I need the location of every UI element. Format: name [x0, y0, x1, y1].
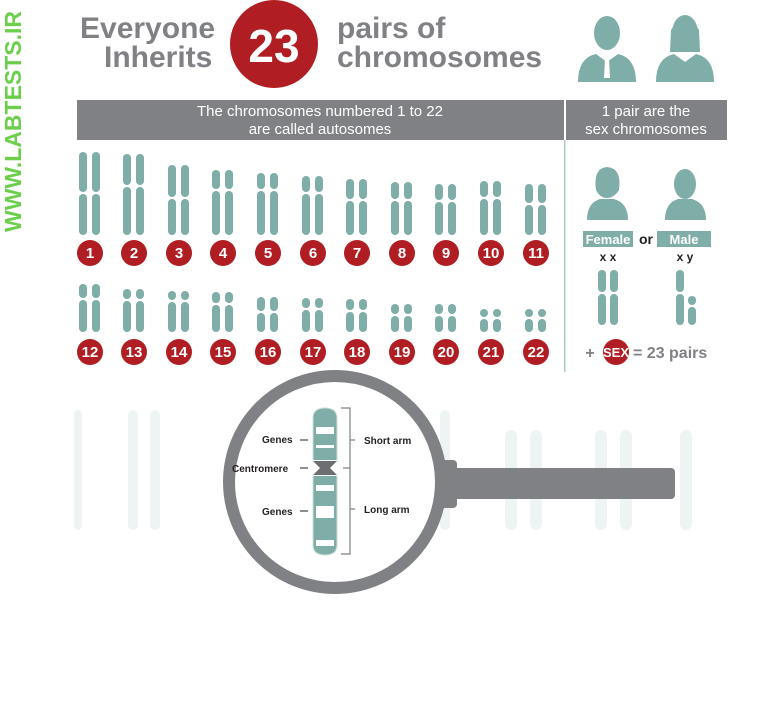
icon: female [587, 167, 628, 220]
badge: 23 [230, 0, 318, 88]
chromosomes row 2 [79, 284, 546, 332]
number badges: 11 [528, 245, 544, 262]
number badges: 8 [398, 245, 406, 262]
header bar: 1 pair are the [602, 103, 690, 120]
sex chromosomes panel: Male [670, 232, 698, 247]
faded background chromosomes [74, 410, 692, 530]
title: chromosomes [337, 41, 542, 74]
number badges: 3 [175, 245, 183, 262]
number badges [77, 240, 549, 365]
icon: woman [656, 15, 714, 82]
number badges: 22 [528, 344, 544, 361]
number badges: 4 [219, 245, 228, 262]
labels: Genes [262, 507, 293, 518]
header bar [77, 100, 727, 140]
bracket [341, 408, 355, 554]
title [80, 12, 542, 74]
header bar: sex chromosomes [585, 121, 707, 138]
number badges: 10 [483, 245, 499, 262]
magnifier [229, 376, 675, 588]
number badges: 6 [309, 245, 317, 262]
header bar: The chromosomes numbered 1 to 22 [197, 103, 443, 120]
sum line [585, 339, 707, 365]
labels [232, 435, 411, 518]
labels: Genes [262, 435, 293, 446]
number badges: 12 [82, 344, 98, 361]
number badges: 14 [171, 344, 188, 361]
number badges: 1 [86, 245, 94, 262]
sum line: + [585, 345, 595, 362]
number badges: 7 [353, 245, 361, 262]
title: Inherits [104, 41, 212, 74]
badge: 23: 23 [248, 20, 300, 72]
number badges: 18 [349, 344, 365, 361]
sex chromosomes panel [583, 167, 711, 365]
icon: male [665, 169, 706, 220]
number badges: 13 [126, 344, 142, 361]
number badges: 16 [260, 344, 276, 361]
number badges: 5 [264, 245, 272, 262]
title: pairs of [337, 12, 446, 45]
labels: Short arm [364, 436, 411, 447]
title: Everyone [80, 12, 215, 45]
icon: man [578, 16, 636, 82]
chromosome diagram [313, 408, 337, 555]
labels: Long arm [364, 505, 410, 516]
number badges: 20 [438, 344, 454, 361]
chromosomes row 1 [79, 152, 546, 235]
sex chromosomes panel: x x [600, 250, 617, 264]
number badges: 19 [394, 344, 410, 361]
watermark: WWW.LABTESTS.IR [0, 11, 26, 232]
number badges: 9 [442, 245, 450, 262]
sex chromosomes panel: x y [677, 250, 694, 264]
sex chromosomes panel: or [639, 231, 654, 247]
sex chromosomes panel: Female [586, 232, 630, 247]
labels: Centromere [232, 464, 289, 475]
number badges: 2 [130, 245, 138, 262]
sum line: SEX [603, 345, 629, 360]
number badges: 21 [483, 344, 499, 361]
number badges: 15 [215, 344, 231, 361]
number badges: 17 [305, 344, 321, 361]
header bar: are called autosomes [249, 121, 391, 138]
sum line: = 23 pairs [633, 345, 707, 362]
